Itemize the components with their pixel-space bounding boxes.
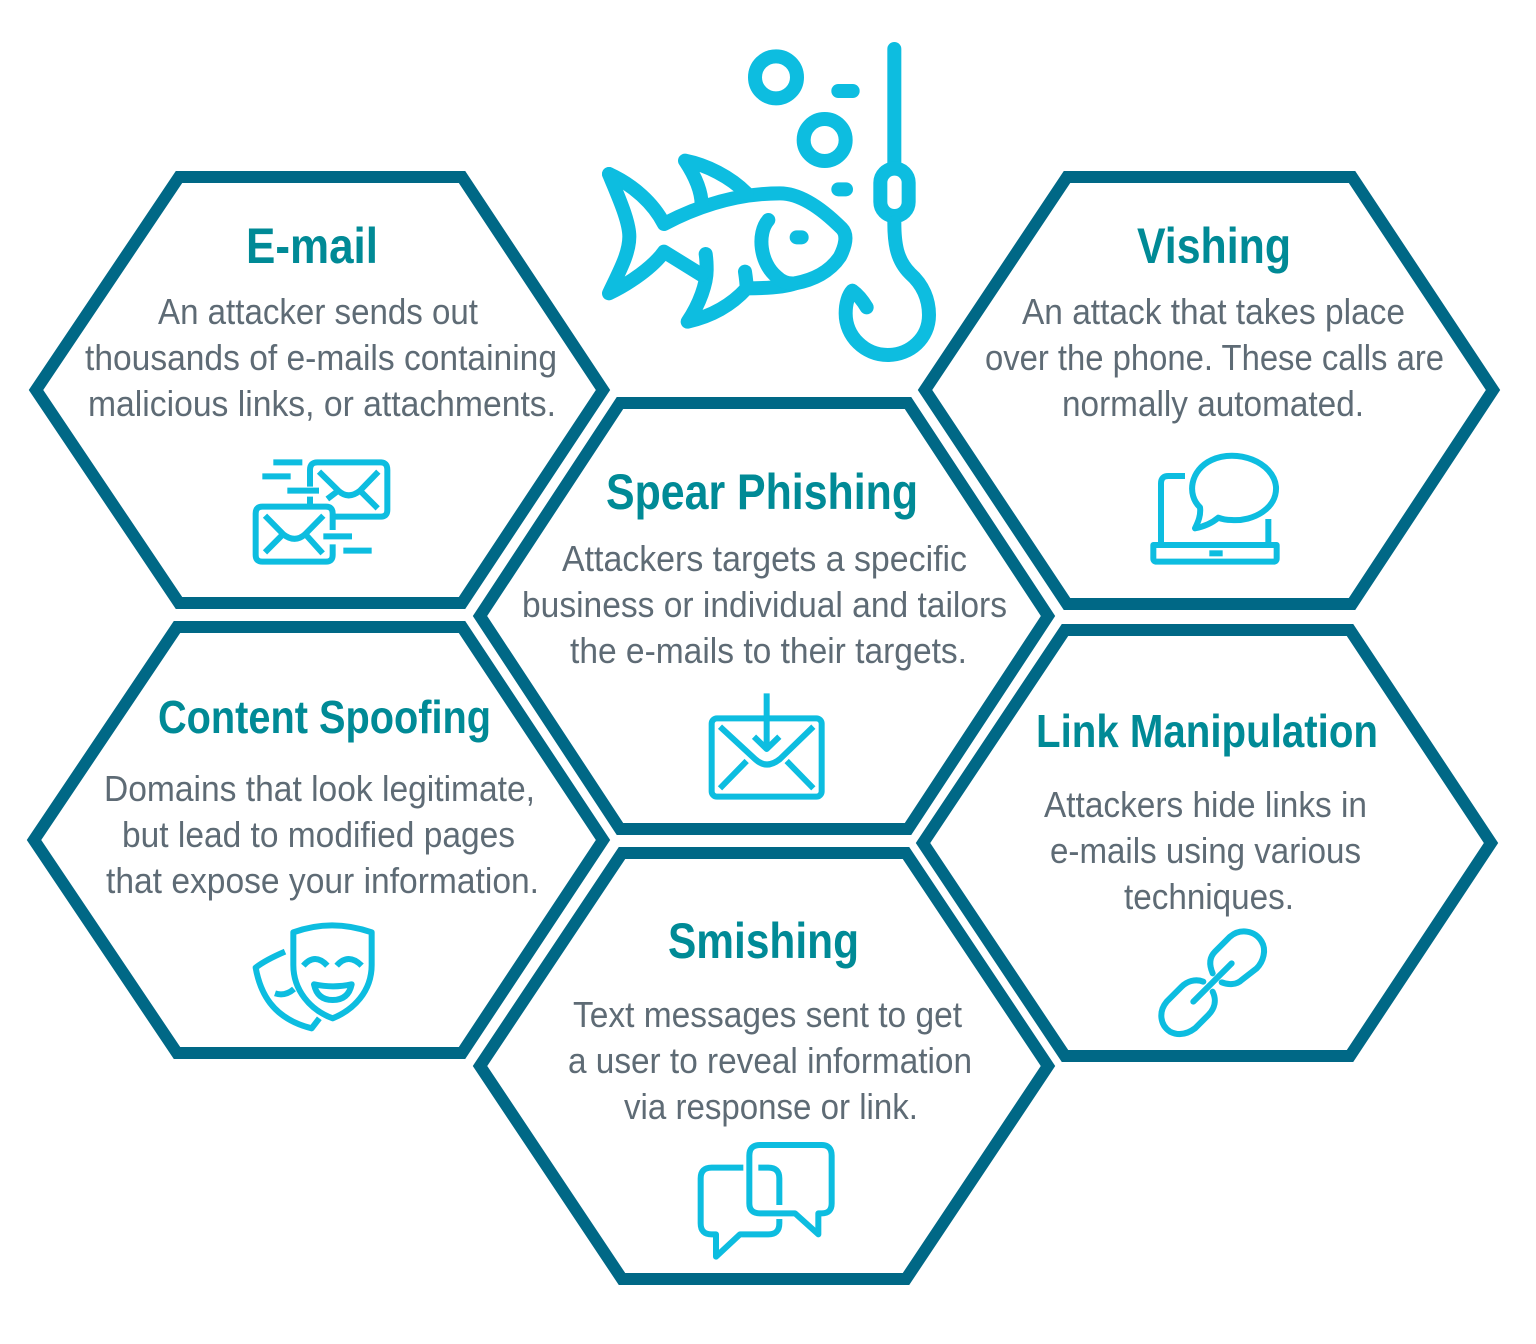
icon: theatre masks (256, 925, 372, 1028)
text: e-mail description: thousands of e-mails containing (85, 337, 557, 378)
panel: link manipulation (923, 630, 1491, 1056)
heading: e-mail: E-mail (246, 218, 378, 274)
text: smishing description: Text messages sent to get (573, 994, 962, 1035)
text: link manipulation description: techniques. (1124, 876, 1294, 917)
panel: smishing (480, 853, 1048, 1279)
icon: chain link (1161, 931, 1264, 1034)
icon: fish and hook (609, 49, 929, 355)
text: smishing description: via response or link. (624, 1086, 918, 1127)
icon: envelope with arrow (712, 693, 822, 797)
text: e-mail description: malicious links, or attachments. (88, 383, 556, 424)
text: vishing description: over the phone. These calls are (985, 337, 1444, 378)
panel: e-mail (36, 177, 603, 603)
panel: content spoofing (34, 627, 603, 1053)
text: smishing description (568, 994, 972, 1127)
icon: laptop with speech bubble (1153, 456, 1277, 562)
text: content spoofing description: but lead to modified pages (122, 814, 515, 855)
panel: vishing (925, 177, 1493, 604)
text: vishing description: An attack that takes place (1022, 291, 1405, 332)
text: spear phishing description: Attackers targets a specific (562, 538, 967, 579)
text: spear phishing description: the e-mails to their targets. (570, 630, 967, 671)
icon: flying envelopes (256, 462, 387, 562)
heading: link manipulation: Link Manipulation (1036, 705, 1378, 757)
heading: spear phishing: Spear Phishing (606, 464, 918, 520)
heading: vishing: Vishing (1137, 218, 1291, 274)
text: content spoofing description: that expose your information. (106, 860, 539, 901)
text: link manipulation description: e-mails using various (1050, 830, 1361, 871)
text: vishing description: normally automated. (1062, 383, 1364, 424)
text: content spoofing description: Domains that look legitimate, (104, 768, 535, 809)
text: content spoofing description (104, 768, 539, 901)
text: vishing description (985, 291, 1444, 424)
text: spear phishing description (522, 538, 1007, 671)
text: spear phishing description: business or individual and tailors (522, 584, 1007, 625)
heading: smishing: Smishing (668, 913, 859, 969)
icon: chat bubbles (701, 1145, 832, 1257)
text: smishing description: a user to reveal information (568, 1040, 972, 1081)
text: link manipulation description: Attackers hide links in (1044, 784, 1367, 825)
text: link manipulation description (1044, 784, 1367, 917)
panel: spear phishing (480, 403, 1048, 829)
heading: content spoofing: Content Spoofing (158, 691, 491, 743)
text: e-mail description (85, 291, 557, 424)
text: e-mail description: An attacker sends out (158, 291, 478, 332)
